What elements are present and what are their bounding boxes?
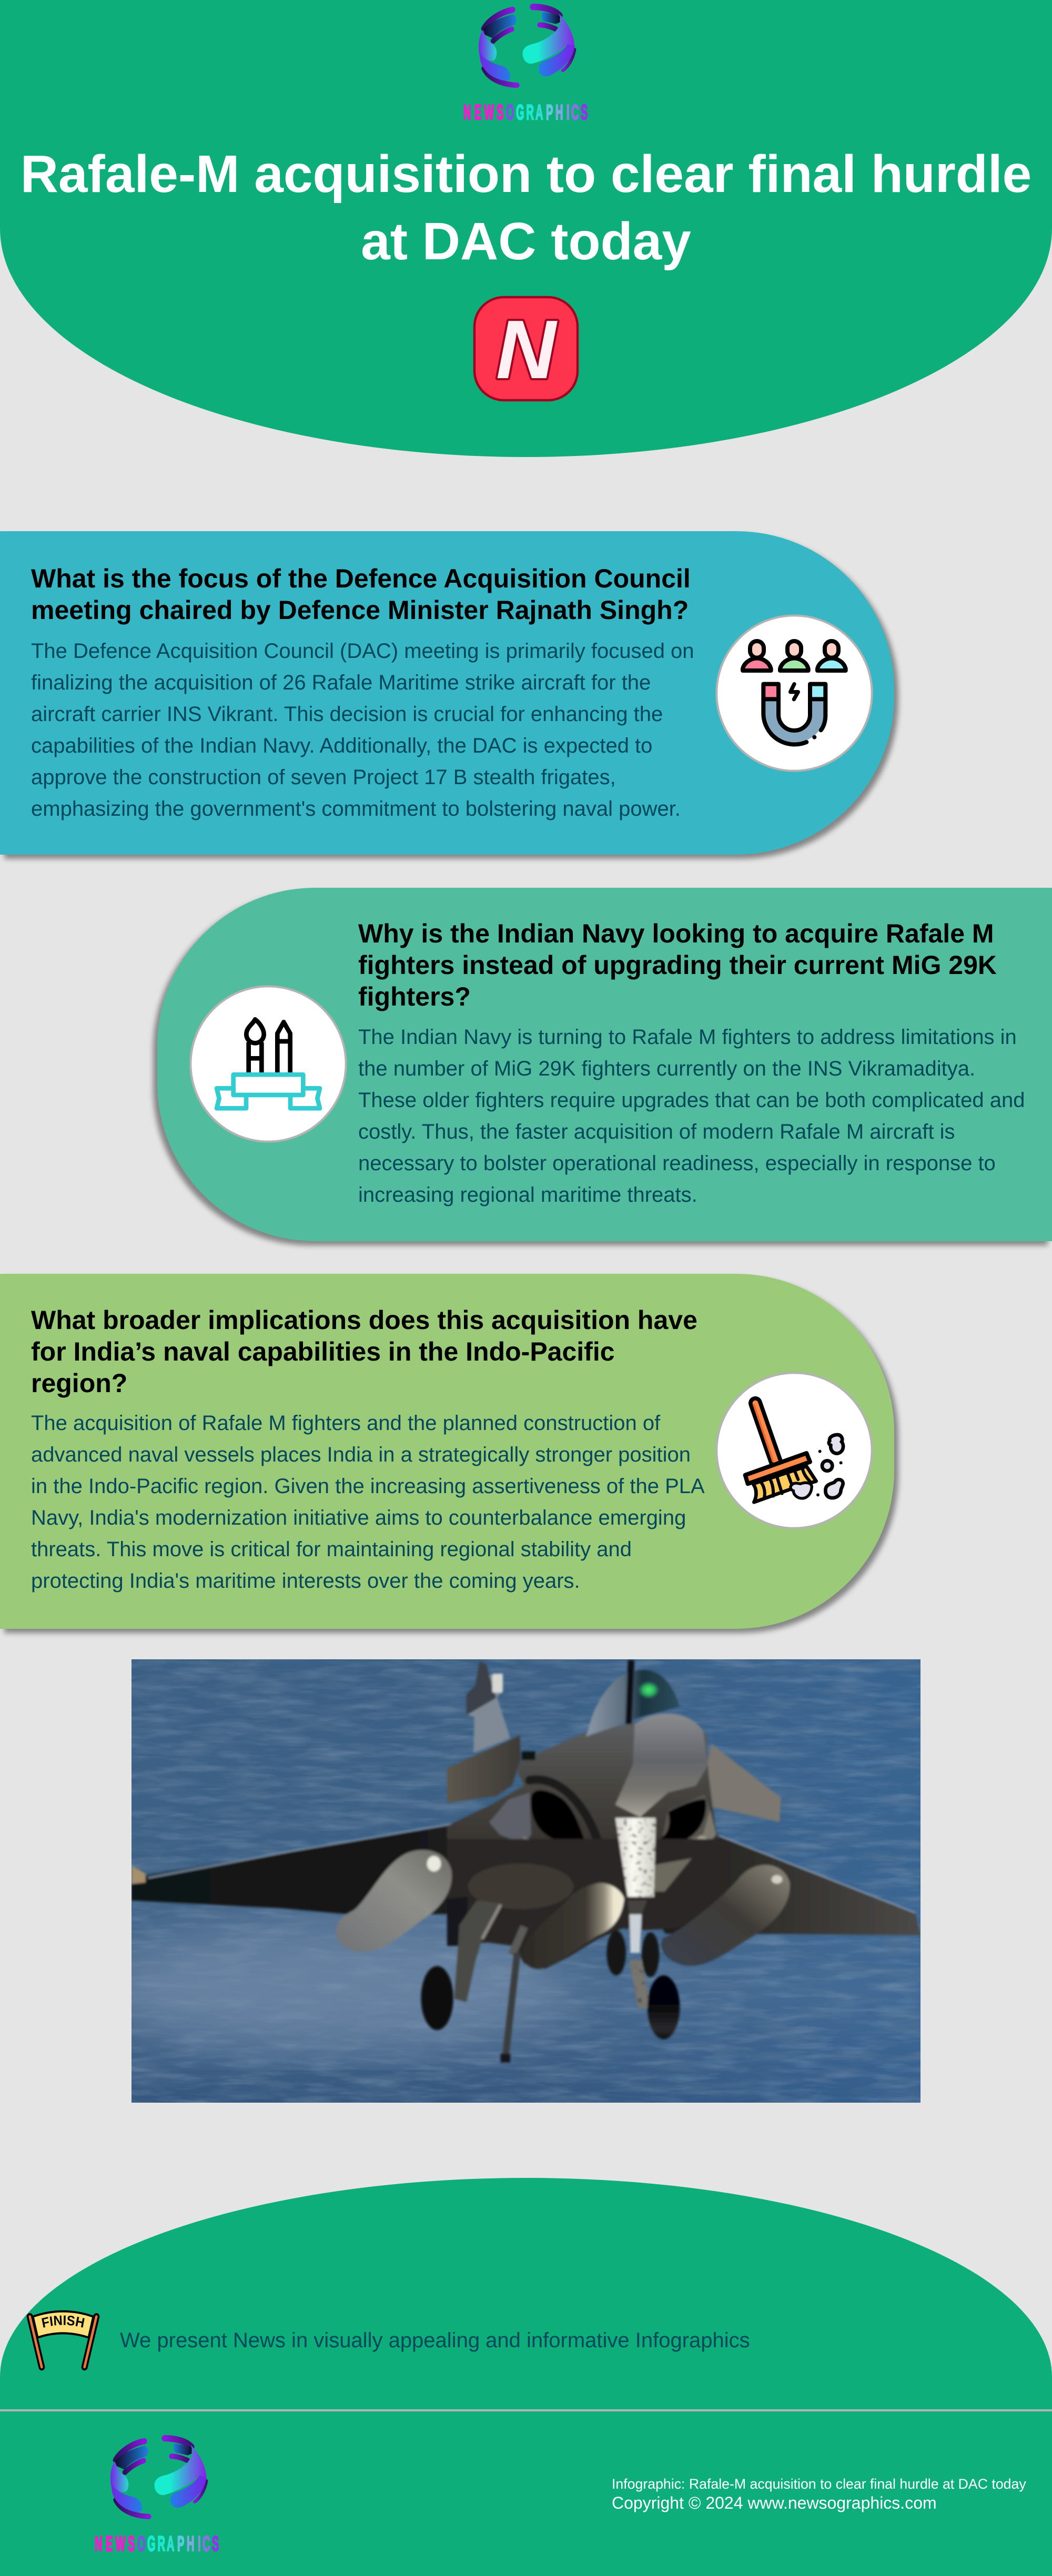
footer logo: W <box>116 2531 125 2555</box>
footer banner <box>0 2178 1052 2576</box>
photo: Rafale M fighter over the sea <box>132 1659 920 2103</box>
text: answer 3: threats. This move is critical for maintaining regional stability and <box>31 1538 632 1561</box>
heading: question 3: What broader implications does this acquisition have <box>31 1305 697 1335</box>
text: answer 2: costly. Thus, the faster acquisition of modern Rafale M aircraft is <box>358 1120 955 1143</box>
heading: question 2: Why is the Indian Navy looking to acquire Rafale M <box>358 919 994 948</box>
text: answer 1 <box>31 640 694 820</box>
text: answer 3: Navy, India's modernization initiative aims to counterbalance emerging <box>31 1506 686 1529</box>
icon: magnet attracting people <box>715 614 873 772</box>
logo: Newsographics: I <box>567 100 570 124</box>
text: answer 3: protecting India's maritime interests over the coming years. <box>31 1569 580 1593</box>
tagline: We present News in visually appealing and informative Infographics <box>120 2329 750 2352</box>
heading: question 3: for India’s naval capabilities in the Indo-Pacific <box>31 1337 615 1366</box>
footer logo: I <box>198 2531 201 2555</box>
text: answer 1: The Defence Acquisition Council (DAC) meeting is primarily focused on <box>31 640 694 663</box>
logo: Newsographics: W <box>484 100 494 124</box>
icon: finish banner <box>26 2310 100 2371</box>
footer logo: H <box>187 2531 194 2555</box>
panel: why Rafale M <box>157 888 1052 1241</box>
footer logo: G <box>147 2531 156 2555</box>
text: answer 3: The acquisition of Rafale M fighters and the planned construction of <box>31 1412 660 1435</box>
text: answer 1: emphasizing the government's commitment to bolstering naval power. <box>31 797 681 820</box>
heading: question 3: region? <box>31 1368 127 1398</box>
heading: question 3 <box>31 1305 697 1398</box>
heading: question 1: meeting chaired by Defence Minister Rajnath Singh? <box>31 595 689 625</box>
text: answer 2 <box>358 1026 1025 1206</box>
footer logo: S <box>212 2531 219 2555</box>
icon: red N badge: N <box>496 303 558 396</box>
logo: Newsographics <box>463 4 588 124</box>
logo: Newsographics: E <box>474 100 481 124</box>
copyright text: Infographic: Rafale-M acquisition to clear final hurdle at DAC today <box>612 2476 1026 2492</box>
footer logo: C <box>203 2531 210 2555</box>
logo: Newsographics: P <box>546 100 553 124</box>
heading: question 2 <box>358 919 997 1011</box>
heading: question 2: fighters instead of upgrading their current MiG 29K <box>358 950 997 980</box>
footer logo: P <box>177 2531 184 2555</box>
logo: Newsographics: A <box>535 100 543 124</box>
text: answer 2: increasing regional maritime threats. <box>358 1183 697 1206</box>
upper fuselage <box>447 1660 721 1880</box>
text: answer 2: the number of MiG 29K fighters currently on the INS Vikramaditya. <box>358 1057 975 1080</box>
logo: Newsographics: S <box>497 100 503 124</box>
footer logo: R <box>158 2531 165 2555</box>
divider line <box>0 2409 1052 2411</box>
text: answer 2: necessary to bolster operational readiness, especially in response to <box>358 1152 996 1175</box>
panel: broader implications <box>0 1274 894 1629</box>
panel: Defence Acquisition Council focus <box>0 531 894 855</box>
logo: Newsographics: S <box>581 100 588 124</box>
text: answer 2: These older fighters require upgrades that can be both complicated and <box>358 1089 1025 1112</box>
header banner <box>0 0 1052 457</box>
logo: Newsographics: R <box>526 100 534 124</box>
text: answer 3 <box>31 1412 705 1593</box>
text: answer 3: advanced naval vessels places India in a strategically stronger position <box>31 1443 691 1466</box>
logo: Newsographics: G <box>516 100 524 124</box>
text: answer 1: aircraft carrier INS Vikrant. This decision is crucial for enhancing the <box>31 703 663 726</box>
footer logo: A <box>167 2531 174 2555</box>
footer logo: N <box>95 2531 102 2555</box>
title: at DAC today <box>361 212 691 271</box>
icon: red N badge <box>473 296 579 402</box>
text: answer 1: capabilities of the Indian Navy. Additionally, the DAC is expected to <box>31 734 652 757</box>
aircraft <box>132 1660 920 2063</box>
footer logo: E <box>106 2531 113 2555</box>
text: answer 1: finalizing the acquisition of 26 Rafale Maritime strike aircraft for the <box>31 671 651 694</box>
footer logo <box>95 2435 219 2555</box>
copyright text <box>612 2476 1026 2512</box>
heading: question 2: fighters? <box>358 982 471 1011</box>
icon: brush and pencil with banner <box>189 985 347 1143</box>
heading: question 1: What is the focus of the Defence Acquisition Council <box>31 564 691 593</box>
footer logo: S <box>128 2531 135 2555</box>
icon: finish banner: FINISH <box>42 2315 85 2328</box>
heading: question 1 <box>31 564 691 625</box>
text: answer 3: in the Indo-Pacific region. Given the increasing assertiveness of the PLA <box>31 1475 705 1498</box>
logo: Newsographics: H <box>555 100 563 124</box>
sea background <box>105 1659 920 2103</box>
text: answer 1: approve the construction of seven Project 17 B stealth frigates, <box>31 766 616 789</box>
footer logo: O <box>137 2531 146 2555</box>
title: Rafale-M acquisition to clear final hurdle <box>21 145 1031 204</box>
logo: Newsographics: O <box>506 100 514 124</box>
lower fuselage and landing gear <box>447 1839 721 1969</box>
logo: Newsographics: C <box>571 100 579 124</box>
icon: broom sweeping dust <box>715 1372 873 1529</box>
logo: Newsographics: N <box>463 100 471 124</box>
text: answer 2: The Indian Navy is turning to Rafale M fighters to address limitations in <box>358 1026 1017 1049</box>
title <box>21 145 1031 271</box>
copyright text: Copyright © 2024 www.newsographics.com <box>612 2493 937 2512</box>
